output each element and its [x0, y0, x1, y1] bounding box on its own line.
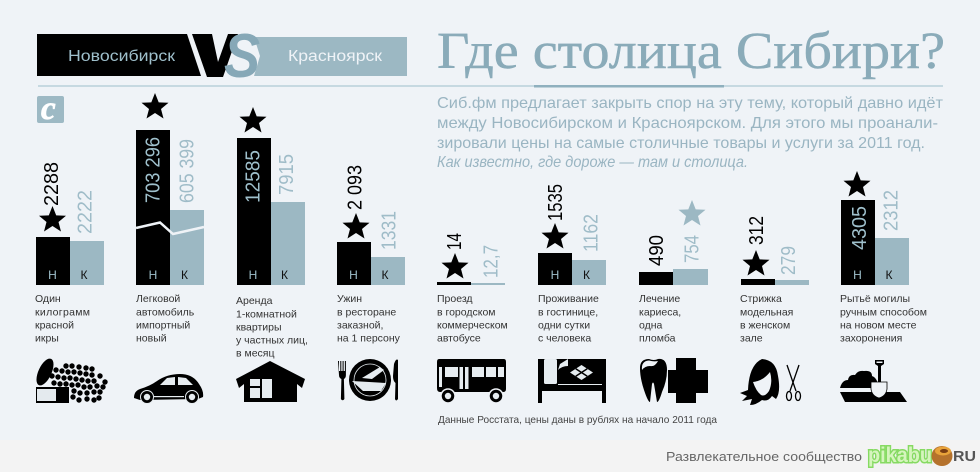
chart: haircut: 312: [746, 216, 768, 245]
label: grave: на новом месте: [840, 320, 917, 332]
logo: Sib.fm: [37, 91, 64, 127]
icon: house: [236, 361, 305, 402]
chart: caviar: 2288: [41, 162, 63, 206]
label: car: новый: [136, 332, 167, 344]
chart: dinner: К: [382, 268, 388, 282]
chart: hotel: 1535: [545, 184, 567, 221]
label: dinner: на 1 персону: [337, 332, 401, 344]
chart: caviar: Н: [48, 268, 57, 282]
label: caviar: красной: [35, 320, 74, 332]
chart: haircut: [741, 216, 809, 285]
label: dinner: Ужин: [337, 293, 362, 305]
chart: grave: 2312: [880, 190, 902, 231]
label: grave: Рытьё могилы: [840, 293, 910, 305]
intro paragraph: [437, 95, 944, 171]
chart: dinner: Н: [349, 268, 358, 282]
chart: grave: К: [886, 268, 892, 282]
chart: haircut: 279: [778, 246, 800, 275]
chart: car: К: [181, 268, 188, 282]
intro paragraph: между Новосибирском и Красноярском. Для этого мы проанали-: [437, 115, 938, 132]
label: caviar: килограмм: [35, 306, 90, 318]
chart: car: 703 296: [142, 137, 164, 203]
label: car: Легковой: [136, 293, 180, 305]
label: caviar: икры: [35, 332, 59, 344]
logo: Sib.fm: с: [41, 91, 56, 127]
chart: dinner: 1331: [378, 211, 400, 250]
Novosibirsk banner: Новосибирск: [68, 48, 175, 65]
chart: hotel: 1162: [580, 214, 602, 252]
label: grave: ручным способом: [840, 306, 927, 318]
title: Где столица Сибири?: [437, 23, 945, 80]
chart: car: 605 399: [176, 139, 198, 203]
footer branding: pikabu: [868, 444, 932, 467]
chart: car: Н: [149, 268, 157, 282]
versus header: [37, 22, 407, 91]
icon: shovel and grave mound: [840, 360, 907, 402]
intro paragraph: Как известно, где дороже — там и столица.: [437, 154, 748, 171]
chart: dentist: 490: [646, 235, 668, 266]
source note: Данные Росстата, цены даны в рублях на начало 2011 года: [438, 414, 717, 426]
footer branding: RU: [953, 448, 976, 465]
icon: car: [134, 374, 203, 404]
chart: hotel: К: [583, 268, 590, 282]
Krasnoyarsk banner: [254, 37, 407, 76]
label: dinner: в ресторане: [337, 306, 396, 318]
label: haircut: зале: [740, 332, 763, 344]
chart: bus fare: 12,7: [480, 245, 502, 278]
label: dinner: [337, 293, 401, 344]
intro paragraph: Сиб.фм предлагает закрыть спор на эту тему, который давно идёт: [437, 95, 944, 112]
chart: rent: Н: [249, 268, 257, 282]
chart: caviar: К: [80, 268, 88, 282]
icon: bus: [437, 359, 506, 403]
chart: bus fare: [437, 233, 505, 285]
footer branding: Развлекательное сообщество: [666, 449, 862, 464]
icon: tooth and cross: [640, 358, 708, 403]
label: dinner: заказной,: [337, 320, 383, 332]
chart: bus fare: 14: [444, 233, 466, 250]
chart: rent: [237, 107, 305, 285]
label: bus: коммерческом: [437, 320, 508, 332]
chart: car: [136, 93, 204, 285]
label: dentist: кариеса,: [639, 306, 681, 318]
label: car: [136, 293, 195, 344]
chart: hotel: Н: [551, 268, 559, 282]
label: hotel: Проживание: [538, 293, 599, 305]
footer branding: [666, 444, 976, 467]
VS mark: S: [224, 22, 260, 91]
chart: caviar: 2222: [74, 190, 96, 234]
label: grave: [840, 293, 927, 344]
label: bus: автобусе: [437, 332, 481, 344]
label: bus: Проезд: [437, 293, 473, 305]
Krasnoyarsk banner: Красноярск: [288, 48, 382, 65]
label: haircut: в женском: [740, 320, 790, 332]
label: hotel: в гостинице,: [538, 306, 598, 318]
chart: dinner: [337, 165, 405, 285]
label: bus: [437, 293, 508, 344]
intro paragraph: зировали цены на самые столичные товары и услуги за 2011 год.: [437, 135, 925, 152]
label: haircut: модельная: [740, 306, 793, 318]
label: rent: квартиры: [236, 322, 282, 334]
label: rent: у частных лиц,: [236, 334, 308, 346]
label: rent: Аренда: [236, 295, 273, 307]
label: dentist: Лечение: [639, 293, 680, 305]
header divider: [38, 85, 943, 88]
icon: plate with cutlery: [338, 359, 398, 401]
chart: caviar: [36, 162, 104, 285]
label: bus: в городском: [437, 306, 496, 318]
icon: caviar tin: [33, 356, 108, 403]
chart: dentist: [639, 200, 708, 285]
chart: rent: 12585: [242, 150, 264, 203]
icon: bed: [538, 359, 606, 403]
chart: grave: 4305: [849, 206, 871, 250]
chart: rent: К: [281, 268, 288, 282]
label: grave: захоронения: [840, 332, 902, 344]
label: hotel: с человека: [538, 332, 591, 344]
label: haircut: [740, 293, 793, 344]
icon: hair and scissors: [740, 359, 800, 405]
label: rent: 1-комнатной: [236, 308, 297, 320]
chart: dinner: 2 093: [344, 165, 366, 210]
label: car: автомобиль: [136, 306, 195, 318]
label: hotel: [538, 293, 599, 344]
chart: grave: [841, 171, 909, 285]
VS mark: [192, 22, 260, 91]
label: car: импортный: [136, 320, 190, 332]
label: haircut: Стрижка: [740, 293, 782, 305]
chart: rent: 7915: [276, 154, 298, 195]
label: caviar: [35, 293, 90, 344]
label: rent: в месяц: [236, 348, 275, 360]
label: rent: [236, 295, 308, 360]
label: caviar: Один: [35, 293, 61, 305]
chart: dentist: 754: [682, 235, 704, 263]
label: dentist: пломба: [639, 332, 676, 344]
Novosibirsk banner: [37, 34, 201, 76]
chart: grave: Н: [853, 268, 862, 282]
label: dentist: [639, 293, 681, 344]
chart: hotel: [538, 184, 606, 285]
label: dentist: одна: [639, 320, 663, 332]
label: hotel: одни сутки: [538, 320, 590, 332]
